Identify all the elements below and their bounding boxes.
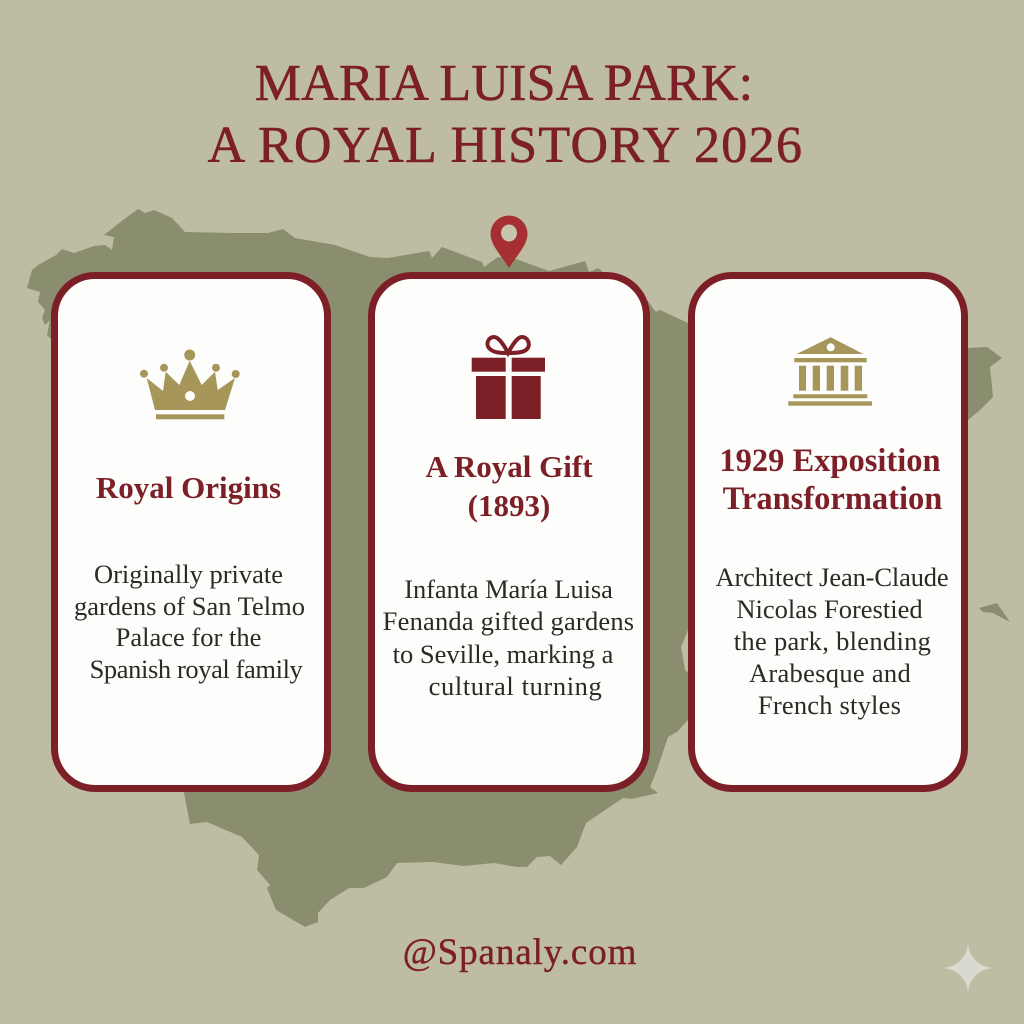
title — [208, 55, 803, 174]
body text — [715, 562, 949, 720]
heading: (1893) — [468, 488, 550, 522]
panel: 1929 exposition — [688, 272, 968, 792]
icon: sparkle — [944, 944, 992, 992]
body text: Originally private — [94, 559, 283, 589]
body text: the park, blending — [734, 626, 931, 656]
body text: French styles — [758, 690, 901, 720]
heading: Transformation — [723, 481, 942, 517]
body text: Fenanda gifted gardens — [383, 606, 634, 636]
panel: a royal gift — [368, 272, 650, 792]
body text — [74, 559, 305, 684]
body text: Arabesque and — [749, 658, 911, 688]
heading — [719, 442, 942, 517]
body text — [383, 574, 634, 701]
body text: cultural turning — [429, 671, 602, 701]
body text: gardens of San Telmo — [74, 590, 305, 620]
body text: to Seville, marking a — [393, 639, 613, 669]
icon: gift box — [472, 335, 545, 419]
body text: Infanta María Luisa — [404, 574, 613, 604]
icon: crown — [140, 350, 240, 420]
body text: Palace for the — [116, 622, 261, 652]
title: MARIA LUISA PARK: — [255, 55, 753, 112]
panel: royal origins — [51, 272, 331, 792]
title: A ROYAL HISTORY 2026 — [208, 117, 803, 174]
heading — [425, 449, 593, 522]
body text: Nicolas Forestied — [736, 594, 923, 624]
heading: A Royal Gift — [425, 449, 593, 484]
body text: Spanish royal family — [90, 654, 302, 684]
icon: map pin — [490, 216, 528, 268]
heading: 1929 Exposition — [719, 442, 941, 478]
icon: classical building — [788, 337, 872, 406]
heading: Royal Origins — [96, 470, 281, 505]
footer handle: @Spanaly.com — [403, 932, 637, 973]
body text: Architect Jean-Claude — [715, 562, 949, 592]
